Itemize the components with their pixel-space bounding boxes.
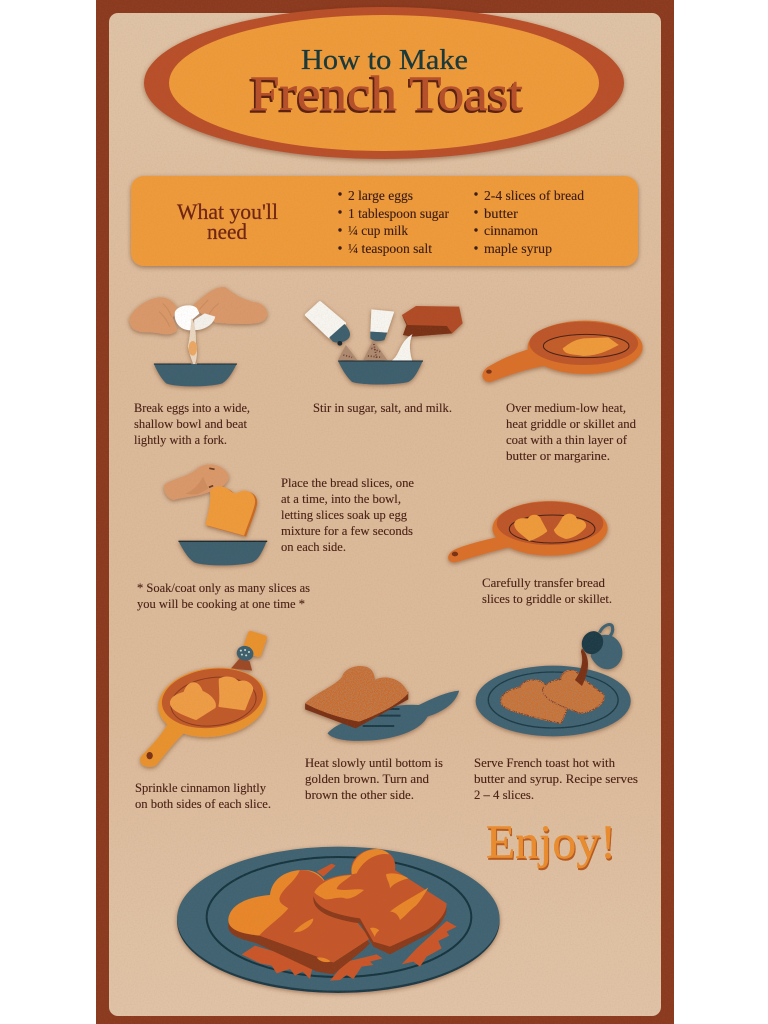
step text: break eggs: lightly with a fork. bbox=[134, 432, 227, 447]
step text: soak bread: Place the bread slices, one bbox=[281, 475, 414, 490]
panel: what you'll need: cinnamon bbox=[484, 223, 538, 238]
step text: transfer bread: slices to griddle or skillet. bbox=[482, 591, 612, 606]
heading: Enjoy!: Enjoy! bbox=[487, 818, 617, 871]
icon: skillet with butter bbox=[482, 321, 643, 382]
note: soak only as many slices bbox=[137, 580, 310, 611]
step text: soak bread: at a time, into the bowl, bbox=[281, 491, 401, 506]
step text: break eggs: shallow bowl and beat bbox=[134, 416, 247, 431]
step text: stir: Stir in sugar, salt, and milk. bbox=[313, 400, 452, 415]
title banner: French Toast bbox=[250, 65, 523, 121]
title banner bbox=[144, 7, 624, 159]
icon: hands cracking egg over bowl bbox=[129, 287, 267, 386]
icon: skillet with cinnamon shaker bbox=[140, 630, 271, 767]
icon: skillet with two bread slices bbox=[448, 501, 608, 562]
panel: what you'll need: ¼ cup milk bbox=[348, 223, 408, 238]
step text: heat griddle: heat griddle or skillet and bbox=[506, 416, 636, 431]
step text: heat griddle bbox=[506, 400, 636, 463]
step text: heat slowly: Heat slowly until bottom is bbox=[305, 755, 443, 770]
note: soak only as many slices: * Soak/coat only as many slices as bbox=[137, 580, 310, 595]
panel: what you'll need: maple syrup bbox=[484, 241, 552, 256]
step text: soak bread: letting slices soak up egg bbox=[281, 507, 407, 522]
panel: what you'll need: 2-4 slices of bread bbox=[484, 188, 584, 203]
panel: what you'll need: 1 tablespoon sugar bbox=[348, 206, 449, 221]
step text: serve: butter and syrup. Recipe serves bbox=[474, 771, 638, 786]
panel: what you'll need: ¼ teaspoon salt bbox=[348, 241, 432, 256]
step text: transfer bread bbox=[482, 575, 612, 606]
step text: heat griddle: Over medium-low heat, bbox=[506, 400, 626, 415]
step text: serve: 2 – 4 slices. bbox=[474, 787, 534, 802]
paper panel bbox=[109, 13, 661, 1016]
heading: Enjoy!: Enjoy! bbox=[486, 816, 616, 869]
page frame bbox=[96, 0, 674, 1024]
step text: soak bread bbox=[281, 475, 414, 554]
step text: heat griddle: butter or margarine. bbox=[506, 448, 610, 463]
step text: serve: Serve French toast hot with bbox=[474, 755, 615, 770]
panel: what you'll need: 2 large eggs bbox=[348, 188, 413, 203]
icon: shakers and milk carton over bowl bbox=[307, 303, 463, 384]
icon: hand dipping bread into bowl bbox=[164, 464, 267, 565]
step text: heat slowly: brown the other side. bbox=[305, 787, 414, 802]
step text: soak bread: on each side. bbox=[281, 539, 346, 554]
illustration: plated French toast with syrup bbox=[177, 847, 500, 993]
step text: break eggs bbox=[134, 400, 250, 447]
step text: heat griddle: coat with a thin layer of bbox=[506, 432, 628, 447]
icon: plate with syrup jug bbox=[476, 624, 631, 736]
step text: sprinkle cinnamon bbox=[135, 780, 271, 811]
title banner: French Toast bbox=[248, 67, 522, 123]
title banner: How to Make bbox=[301, 44, 468, 76]
panel: what you'll need: need bbox=[207, 219, 247, 244]
step text: break eggs: Break eggs into a wide, bbox=[134, 400, 250, 415]
step text: serve bbox=[474, 755, 638, 802]
step text: heat slowly: golden brown. Turn and bbox=[305, 771, 429, 786]
panel: what you'll need: What you'll bbox=[177, 199, 278, 224]
icon: toast on spatula bbox=[305, 666, 459, 741]
step text: sprinkle cinnamon: Sprinkle cinnamon lightly bbox=[135, 780, 266, 795]
step text: transfer bread: Carefully transfer bread bbox=[482, 575, 605, 590]
step text: heat slowly bbox=[305, 755, 443, 802]
panel: what you'll need bbox=[131, 176, 638, 266]
note: soak only as many slices: you will be cooking at one time * bbox=[137, 596, 305, 611]
paper texture bbox=[96, 0, 674, 1024]
panel: what you'll need: butter bbox=[484, 206, 519, 221]
step text: sprinkle cinnamon: on both sides of each slice. bbox=[135, 796, 271, 811]
step text: soak bread: mixture for a few seconds bbox=[281, 523, 413, 538]
